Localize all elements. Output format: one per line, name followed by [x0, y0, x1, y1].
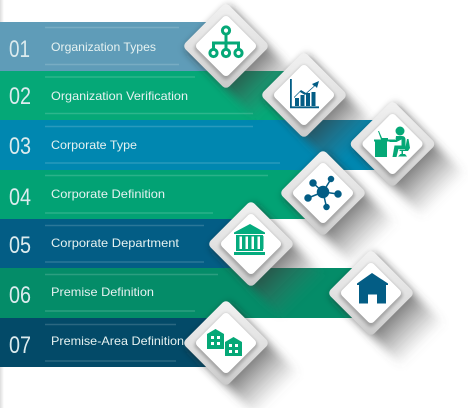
- icon tile 5: institution building: [207, 200, 325, 318]
- band 4: Corporate Definition: [0, 170, 323, 219]
- band 4: Corporate Definition: Corporate Definition: [51, 187, 165, 201]
- band 1: Organization Types: 01: [9, 36, 30, 63]
- icon tile 4: network hub: [279, 149, 397, 267]
- icon tile 1: organization chart: [182, 2, 300, 120]
- band 5: Corporate Department: Corporate Department: [51, 236, 180, 250]
- band 7: Premise-Area Definition: 07: [9, 332, 31, 359]
- left page edge shade: [0, 0, 4, 408]
- band 4: Corporate Definition: 04: [9, 184, 31, 211]
- band 1: Organization Types: [0, 22, 226, 71]
- icon tile 2: rising bar chart: [260, 51, 378, 169]
- band 2: Organization Verification: Organization Verification: [51, 89, 188, 103]
- band 7: Premise-Area Definition: Premise-Area Definition: [51, 334, 184, 348]
- band 2: Organization Verification: [0, 71, 304, 120]
- band 7: Premise-Area Definition: [0, 318, 226, 367]
- band 6: Premise Definition: Premise Definition: [51, 285, 154, 299]
- band 6: Premise Definition: [0, 268, 371, 318]
- band 5: Corporate Department: 05: [9, 232, 31, 259]
- band 6: Premise Definition: 06: [9, 282, 31, 309]
- icon tile 3: person working at desk: [349, 100, 467, 218]
- band 3: Corporate Type: 03: [9, 133, 31, 160]
- icon tile 6: house: [327, 249, 445, 367]
- band 3: Corporate Type: [0, 120, 392, 170]
- band 3: Corporate Type: Corporate Type: [51, 138, 137, 152]
- band 5: Corporate Department: [0, 219, 251, 268]
- band 2: Organization Verification: 02: [9, 83, 31, 110]
- icon tile 7: two buildings: [182, 299, 300, 408]
- band 1: Organization Types: Organization Types: [51, 40, 156, 54]
